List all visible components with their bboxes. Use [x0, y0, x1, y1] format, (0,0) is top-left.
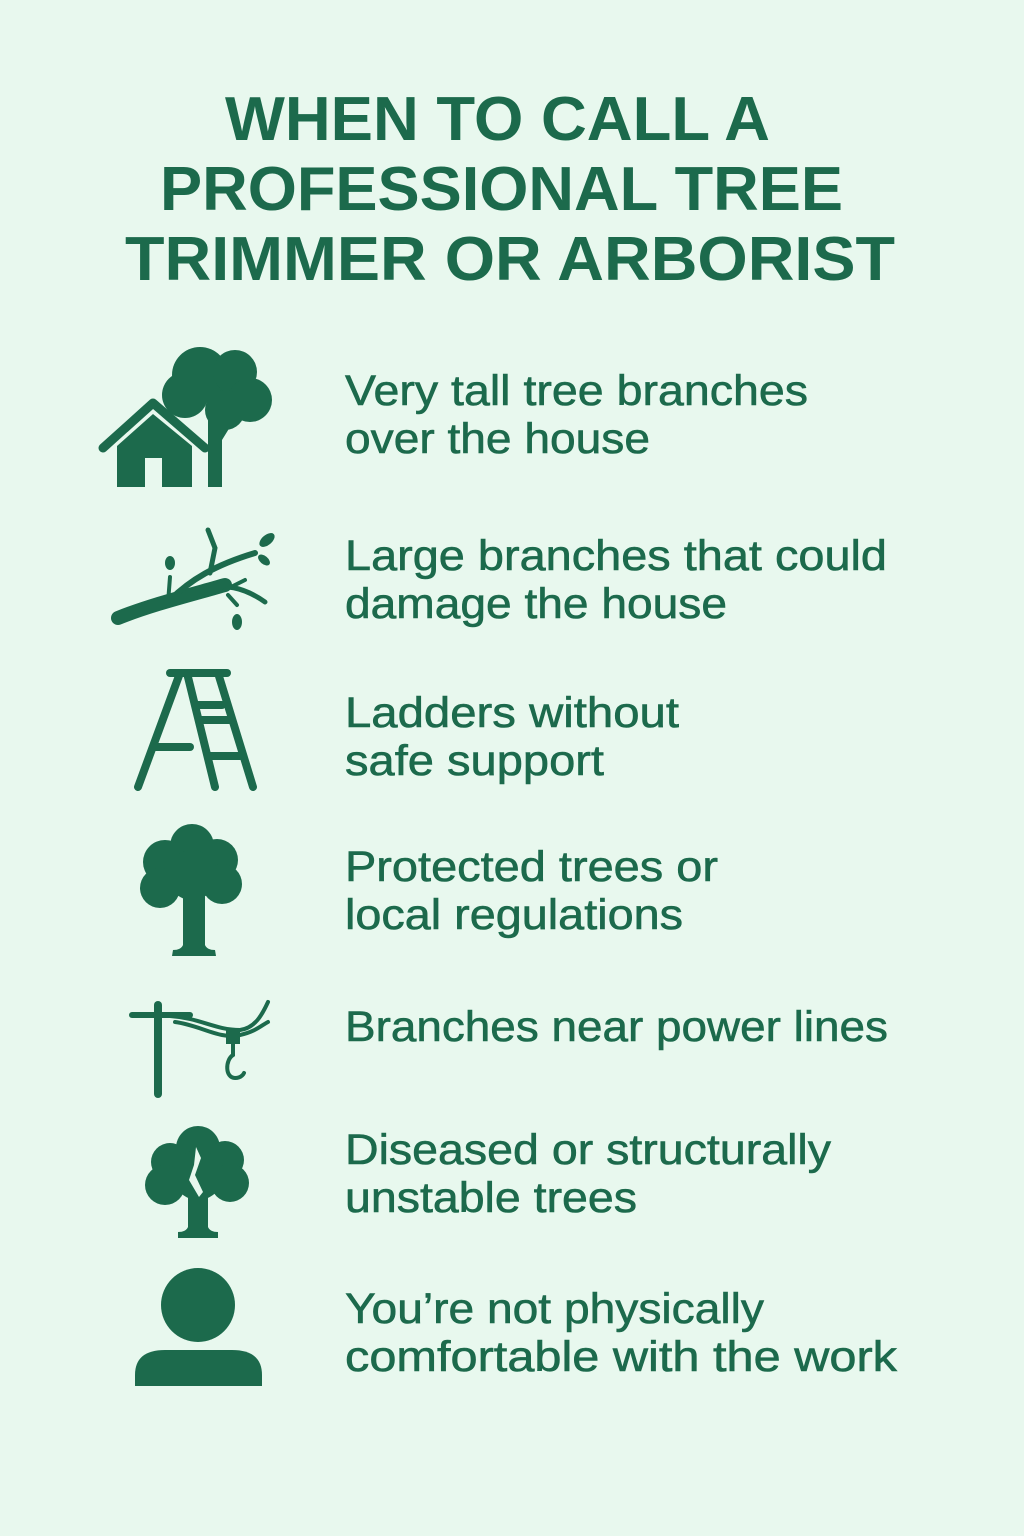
item 2: Large branches that could — [345, 532, 887, 580]
item 3 — [345, 689, 679, 785]
icon: tree — [140, 824, 242, 956]
title: PROFESSIONAL TREE — [160, 155, 843, 224]
item 4 — [345, 843, 718, 939]
item 1 — [345, 367, 808, 463]
item 6 — [345, 1126, 832, 1222]
item 6: unstable trees — [345, 1174, 637, 1222]
title — [125, 85, 895, 294]
item 2: damage the house — [345, 580, 727, 628]
icon: branch — [118, 530, 277, 630]
icon: house with tree — [103, 347, 272, 487]
item 3: Ladders without — [345, 689, 679, 737]
item 7: comfortable with the work — [345, 1333, 898, 1381]
item 4: Protected trees or — [345, 843, 718, 891]
icon: power line — [132, 1002, 268, 1094]
item 1: over the house — [345, 415, 650, 463]
item 3: safe support — [345, 737, 604, 785]
title: WHEN TO CALL A — [225, 85, 770, 154]
item 7: You’re not physically — [345, 1285, 765, 1333]
text list — [345, 367, 898, 1381]
item 6: Diseased or structurally — [345, 1126, 832, 1174]
item 7 — [345, 1285, 898, 1381]
icon: diseased tree — [145, 1126, 249, 1238]
icon: person — [135, 1268, 262, 1386]
item 2 — [345, 532, 887, 628]
item 1: Very tall tree branches — [345, 367, 808, 415]
icon: ladder — [138, 673, 253, 787]
item 5: Branches near power lines — [345, 1003, 888, 1051]
title: TRIMMER OR ARBORIST — [125, 225, 895, 294]
item 4: local regulations — [345, 891, 683, 939]
